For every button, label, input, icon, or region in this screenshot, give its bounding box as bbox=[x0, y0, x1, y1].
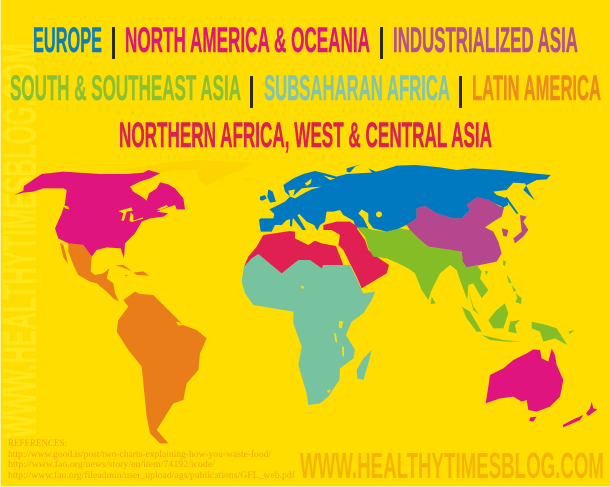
map: Industrialized Asia bbox=[407, 197, 528, 267]
legend heading: region names bbox=[10, 21, 601, 155]
map: Americas and Greenland bbox=[14, 160, 253, 443]
map: Caribbean islands bbox=[115, 265, 149, 276]
map: South America bbox=[117, 292, 207, 443]
legend heading: region names: EUROPE bbox=[33, 21, 102, 60]
map: northern and British islands bbox=[260, 164, 518, 227]
map: North America bbox=[14, 170, 185, 258]
references: REFERENCES: bbox=[8, 438, 67, 448]
map: Greenland (faint) bbox=[113, 160, 253, 186]
map: Europe and Russia bbox=[259, 165, 551, 232]
map: Madagascar bbox=[357, 350, 372, 380]
map: Indonesia, Philippines and New Guinea bbox=[462, 274, 574, 345]
map: Northern Africa and West Asia bbox=[244, 222, 389, 288]
map: South and Southeast Asia bbox=[357, 227, 506, 300]
map: Australia bbox=[486, 348, 563, 412]
legend heading: region names: SOUTH & SOUTHEAST ASIA bbox=[10, 69, 241, 108]
map: Great Lakes bbox=[63, 205, 168, 222]
map: Aral Sea bbox=[376, 211, 382, 217]
map: Eurasia, Africa and Oceania bbox=[242, 164, 597, 427]
map: New Zealand bbox=[563, 402, 597, 427]
map: Baltic and White Sea bbox=[288, 175, 335, 198]
map: Mexico and Central America bbox=[60, 243, 119, 302]
references: http://www.fao.org/news/story/en/item/74192/icode/ bbox=[8, 459, 216, 469]
map: Subsaharan Africa bbox=[242, 254, 375, 405]
world map bbox=[14, 160, 597, 443]
references bbox=[8, 438, 295, 480]
map: Tasmania bbox=[529, 417, 537, 422]
map: African lakes bbox=[301, 285, 344, 393]
references: http://www.good.is/post/two-charts-explaining-how-you-waste-food/ bbox=[8, 449, 272, 459]
references: http://www.fao.org/fileadmin/user_upload/ags/publications/GFL_web.pdf bbox=[8, 470, 295, 480]
map: Sri Lanka bbox=[431, 297, 436, 304]
